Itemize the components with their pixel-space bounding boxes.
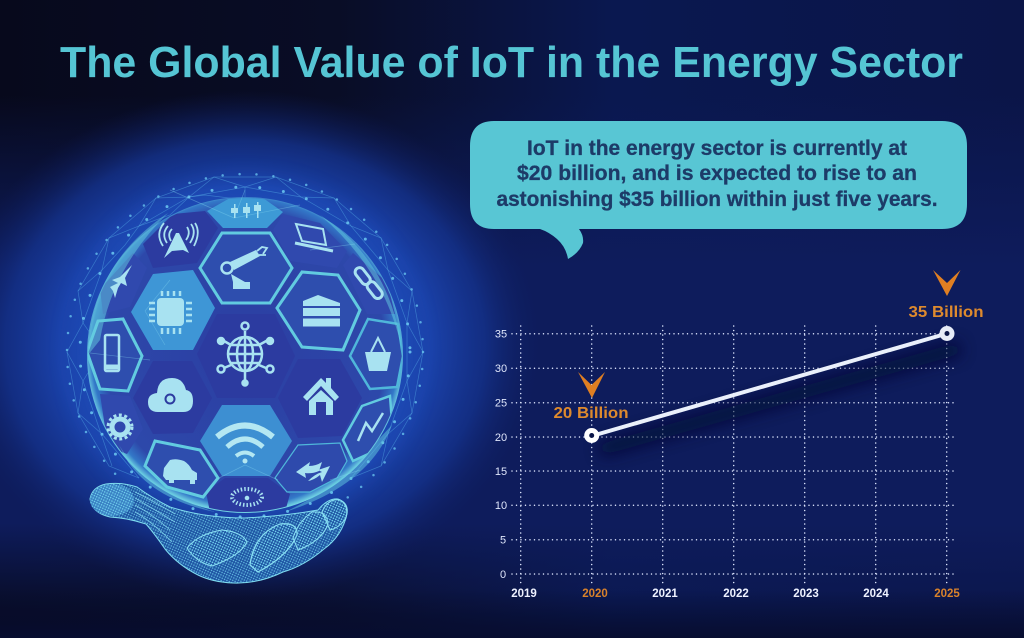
sphere [87,197,403,513]
y axis labels: 5 [500,534,506,546]
hex: robot arm [200,233,292,303]
icon: link chain [353,266,384,300]
x axis labels: 2024 [863,588,889,600]
callout text: $20 billion, and is expected to rise to an [517,161,917,185]
rim crescents [88,213,402,512]
finger 2 [250,524,297,572]
title: The Global Value of IoT in the Energy Sector [60,38,963,87]
y axis labels: 25 [495,398,507,410]
x axis labels [511,588,960,600]
illustration: globe of IoT icons held in a hand [67,174,423,583]
hex: basket [350,319,403,389]
x axis labels: 2023 [793,588,819,600]
icon: server rack [303,295,340,326]
y axis labels: 30 [495,363,507,375]
sphere mesh highlights [90,190,360,480]
x axis labels: 2022 [723,588,749,600]
finger 1 [187,530,247,566]
icon: cloud sync [148,378,193,412]
hex: cloud [133,361,204,434]
x axis labels: 2020 [582,588,608,600]
label: 35 Billion: 35 Billion [908,304,984,321]
finger 3 [293,512,328,550]
icon: robot arm [222,247,267,289]
icon: radial dial [232,489,262,505]
hex: tower [143,211,218,268]
hex: wifi [200,405,292,476]
hex: chart [343,396,392,461]
data line [592,334,947,436]
icon: gear [108,415,132,439]
network mesh around globe [67,174,423,530]
point 2025 [940,326,954,341]
callout text: astonishing $35 billion within just five years. [496,187,938,211]
icon: car [163,459,197,484]
icon: smartphone [105,335,119,371]
hex: chip [131,270,215,350]
label: 20 Billion: 20 Billion [554,405,628,422]
chart gridlines [512,326,957,583]
icon: signal tower [159,223,198,258]
x axis labels: 2019 [511,588,537,600]
hex: house [278,359,362,438]
icon: shopping basket [365,338,391,371]
hex: car [145,441,218,497]
hex: server [277,272,360,350]
hex: network globe [197,314,295,398]
icon: microchip [149,291,192,334]
y axis labels: 10 [495,500,507,512]
point-cloud hand [90,483,347,583]
line chart [495,270,984,600]
y axis labels: 20 [495,432,507,444]
thumb scan lines [135,492,175,542]
hex: plane [100,254,137,314]
icon: connected globe [218,322,274,386]
thumb tip [90,484,134,516]
icon: airplane [110,265,132,298]
y axis labels [495,328,507,581]
icon: line trend [358,413,383,441]
callout text: IoT in the energy sector is currently at [527,136,907,160]
x axis labels: 2021 [652,588,678,600]
speech bubble callout [470,121,967,259]
icon: house [303,378,339,415]
callout text [496,136,938,211]
icon: sliders [231,202,261,218]
finger 4 [322,500,347,530]
arrow marker 2020 [578,372,605,398]
arrow marker 2025 [933,270,960,296]
hex: gear [100,394,134,454]
icons [105,202,391,505]
icon: laptop [295,224,333,251]
point 2020 [584,428,599,443]
y axis labels: 15 [495,466,507,478]
hex: top sliders [207,198,283,228]
y axis labels: 35 [495,328,507,340]
x axis labels: 2025 [934,588,960,600]
y axis labels: 0 [500,569,506,581]
data line shadow [600,348,960,450]
hex: dial [206,478,290,512]
icon: wifi [217,426,273,464]
hex: chain [351,253,395,314]
hex: laptop [290,216,343,248]
hex: phone [87,319,142,391]
icon: refresh arrows [296,462,330,482]
hex: arrows [275,443,347,492]
hexagon panels [87,198,403,512]
